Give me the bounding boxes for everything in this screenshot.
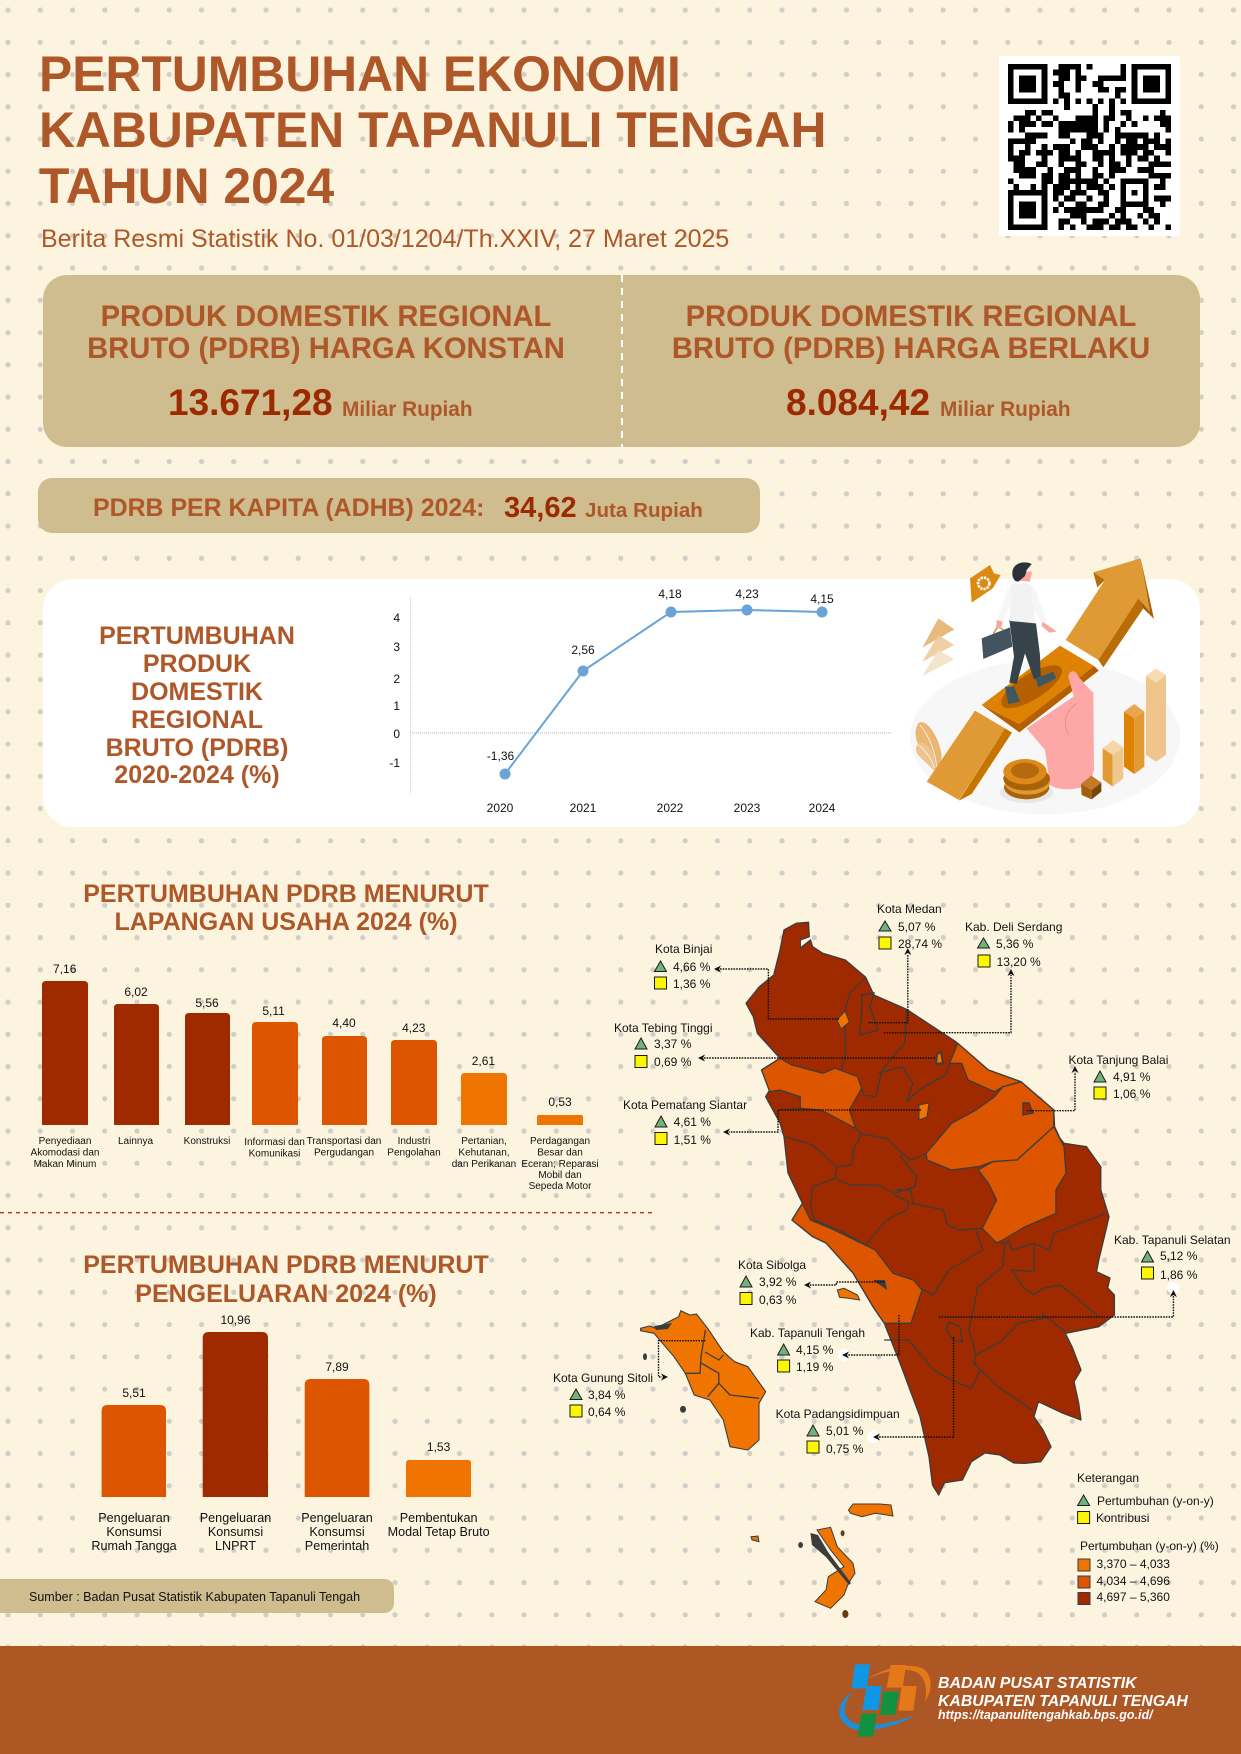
line chart: 4,18 (658, 587, 682, 601)
bar chart: pengeluaran: 5,51 (122, 1386, 146, 1400)
bar labels: Modal Tetap Bruto (388, 1525, 490, 1539)
callout: Kota Tanjung Balai: 4,91 % (1113, 1070, 1151, 1084)
bar labels: Industri (398, 1136, 430, 1147)
map: Sumatera Utara (641, 922, 1114, 1618)
line chart: 0 (393, 727, 400, 741)
heading: pengeluaran (83, 1251, 489, 1308)
bars (1103, 740, 1123, 755)
callout: Kab. Tapanuli Selatan: 5,12 % (1160, 1249, 1198, 1263)
bar labels: Pengeluaran (98, 1511, 170, 1525)
QR code (999, 56, 1180, 236)
callout: Kota Pematang Siantar: 4,61 % (674, 1115, 711, 1129)
map legend: 4,697 – 5,360 (1096, 1590, 1170, 1604)
panel text: harga berlaku: BRUTO (PDRB) HARGA BERLAKU (672, 333, 1150, 365)
line chart: 2022 (657, 801, 684, 815)
bar labels: Pertanian, (461, 1136, 507, 1147)
callout: Kota Padangsidimpuan: 0,75 % (826, 1442, 864, 1456)
callout: Kab. Deli Serdang: 5,36 % (996, 937, 1034, 951)
callout: Kota Gunung Sitoli: Kota Gunung Sitoli (553, 1371, 653, 1385)
bar labels: Makan Minum (34, 1159, 96, 1170)
line chart: 2 (393, 672, 400, 686)
callout: Kab. Tapanuli Tengah: Kab. Tapanuli Tengah (750, 1326, 865, 1340)
bar chart: lapangan usaha: 2,61 (472, 1054, 495, 1068)
callout: Kab. Deli Serdang (965, 920, 1062, 969)
chart heading: BRUTO (PDRB) (106, 734, 288, 762)
callout: Kota Tanjung Balai: Kota Tanjung Balai (1068, 1053, 1168, 1067)
bar labels: Konsumsi (106, 1525, 162, 1539)
callout: Kota Pematang Siantar (623, 1098, 747, 1147)
chart heading: DOMESTIK (131, 678, 263, 706)
map legend: Pertumbuhan (y-on-y) (%) (1080, 1539, 1219, 1553)
panel: PDRB per kapita (38, 478, 760, 533)
gear bubble (970, 565, 1001, 603)
cube (1081, 776, 1101, 790)
heading: pengeluaran: PENGELUARAN 2024 (%) (135, 1280, 437, 1308)
bar labels: Lainnya (118, 1136, 153, 1147)
panel: PDRB per kapita: PDRB PER KAPITA (ADHB) 2024: (93, 494, 484, 522)
small city shapes (837, 1011, 849, 1029)
callout: Kota Tebing Tinggi: 0,69 % (654, 1055, 692, 1069)
region borders (778, 977, 1106, 1410)
bar labels: Transportasi dan (307, 1136, 381, 1147)
title: TAHUN 2024 (39, 158, 334, 214)
callout: Kab. Deli Serdang: 13,20 % (997, 955, 1041, 969)
illustration: man walking on rising arrow (916, 558, 1166, 803)
map legend: Pertumbuhan (y-on-y) (1097, 1494, 1214, 1508)
callout: Kota Tanjung Balai (1068, 1053, 1168, 1101)
callout: Kota Medan: Kota Medan (877, 902, 942, 916)
map legend: Keterangan (1077, 1471, 1139, 1485)
line chart: 2020 (487, 801, 514, 815)
callout: Kota Padangsidimpuan: 5,01 % (826, 1424, 864, 1438)
map legend: 4,034 – 4,696 (1096, 1574, 1170, 1588)
bar labels: Sepeda Motor (529, 1181, 592, 1192)
line chart: 2024 (809, 801, 836, 815)
callout: Kab. Tapanuli Tengah: 4,15 % (796, 1343, 834, 1357)
callout: Kota Binjai: Kota Binjai (655, 942, 712, 956)
panel text: harga konstan: 13.671,28 (168, 382, 333, 423)
chart heading: REGIONAL (131, 706, 263, 734)
bar chart: lapangan usaha: 0,53 (548, 1095, 572, 1109)
line chart: 2023 (734, 801, 761, 815)
bar chart: lapangan usaha: 7,16 (53, 962, 77, 976)
panel text: harga berlaku: PRODUK DOMESTIK REGIONAL (686, 301, 1136, 333)
panel text: harga berlaku: 8.084,42 (786, 382, 930, 423)
callout: Kota Padangsidimpuan: Kota Padangsidimpuan (776, 1407, 900, 1421)
title: PERTUMBUHAN EKONOMI (39, 46, 681, 102)
callout: Kota Binjai: 1,36 % (673, 977, 711, 991)
bar labels: Eceran; Reparasi (521, 1159, 599, 1170)
bar labels: Pemerintah (305, 1539, 369, 1553)
agency name (938, 1675, 1188, 1722)
title (39, 46, 826, 214)
bar labels: Pergudangan (314, 1148, 374, 1158)
Nias island (641, 1311, 766, 1450)
callout: Kota Binjai: 4,66 % (673, 960, 711, 974)
line chart: 4,23 (735, 587, 759, 601)
panel text: harga konstan: PRODUK DOMESTIK REGIONAL (101, 301, 551, 333)
map legend: 3,370 – 4,033 (1096, 1557, 1170, 1571)
chart heading: PERTUMBUHAN (99, 622, 295, 650)
callout: Kota Pematang Siantar: Kota Pematang Siantar (623, 1098, 747, 1112)
callout: Kota Binjai (654, 942, 712, 991)
bar labels: Perdagangan (530, 1136, 590, 1147)
bar chart: pengeluaran: 10,96 (220, 1313, 251, 1327)
bar chart: lapangan usaha: 5,56 (195, 996, 219, 1010)
heading: pengeluaran: PERTUMBUHAN PDRB MENURUT (83, 1251, 489, 1279)
hand (1027, 692, 1094, 789)
coins (1000, 782, 1053, 803)
line chart: 3 (393, 640, 400, 654)
line chart: -1,36 (487, 749, 514, 763)
bar chart: pengeluaran (91, 1313, 490, 1553)
bar labels: Informasi dan (244, 1137, 305, 1148)
subtitle: release number: Berita Resmi Statistik No. 01/03/1204/Th.XXIV, 27 Maret 2025 (41, 225, 729, 253)
bar labels: Pembentukan (400, 1511, 477, 1525)
callout: Kab. Deli Serdang: Kab. Deli Serdang (965, 920, 1062, 934)
chart heading: 2020-2024 (%) (114, 761, 280, 789)
title: KABUPATEN TAPANULI TENGAH (39, 102, 826, 158)
map legend (1077, 1471, 1219, 1604)
panel: PDRB per kapita: 34,62 (504, 492, 577, 524)
bar labels (31, 1136, 599, 1192)
callout: Kab. Tapanuli Selatan: Kab. Tapanuli Selatan (1114, 1233, 1231, 1247)
callout: Kota Tebing Tinggi: 3,37 % (654, 1037, 692, 1051)
line chart: 4 (393, 611, 400, 625)
callout: Kota Sibolga: 3,92 % (759, 1275, 797, 1289)
bar labels: Akomodasi dan (31, 1148, 99, 1158)
heading: lapangan usaha (83, 880, 489, 936)
bar labels: Komunikasi (249, 1148, 300, 1160)
callout: Kab. Tapanuli Tengah (750, 1326, 865, 1374)
line chart: -1 (389, 756, 400, 770)
panel text: harga berlaku: Miliar Rupiah (940, 398, 1071, 421)
panel: PDRB per kapita: Juta Rupiah (585, 499, 703, 522)
callout: Kota Gunung Sitoli: 0,64 % (588, 1405, 626, 1419)
heading: lapangan usaha: PERTUMBUHAN PDRB MENURUT (83, 880, 489, 908)
triangles (922, 618, 954, 648)
icon: BPS logo (839, 1664, 931, 1737)
bar labels: Pengeluaran (200, 1511, 271, 1525)
line chart (389, 587, 891, 815)
callout: Kota Pematang Siantar: 1,51 % (674, 1133, 711, 1147)
bar labels: Rumah Tangga (91, 1539, 177, 1553)
callout: Kota Sibolga: 0,63 % (759, 1293, 797, 1307)
bar labels (91, 1511, 490, 1553)
southern islands (848, 1504, 893, 1517)
callout: Kab. Tapanuli Selatan: 1,86 % (1160, 1268, 1198, 1282)
bar labels: Mobil dan (538, 1170, 582, 1181)
callout: Kota Gunung Sitoli (553, 1371, 653, 1419)
source note (0, 1579, 394, 1613)
bar labels: Besar dan (537, 1148, 583, 1158)
callout: Kota Medan: 28,74 % (898, 937, 942, 951)
chart heading (99, 622, 295, 789)
panel: PDRB values (43, 275, 1200, 447)
bar chart: lapangan usaha: 4,23 (402, 1021, 426, 1035)
bar labels: Pengeluaran (301, 1511, 373, 1525)
line chart: 2,56 (571, 643, 595, 657)
heading: lapangan usaha: LAPANGAN USAHA 2024 (%) (114, 908, 458, 936)
bar chart: lapangan usaha (31, 962, 599, 1192)
panel text: harga konstan: BRUTO (PDRB) HARGA KONSTAN (87, 333, 565, 365)
bar chart: lapangan usaha: 4,40 (332, 1016, 356, 1030)
panel: growth chart card (43, 579, 1200, 827)
bar chart: pengeluaran: 1,53 (427, 1440, 451, 1454)
callout: Kab. Tapanuli Tengah: 1,19 % (796, 1360, 834, 1374)
bar chart: lapangan usaha: 6,02 (124, 985, 148, 999)
callout: Kota Tebing Tinggi (614, 1021, 713, 1069)
source note: Sumber : Badan Pusat Statistik Kabupaten Tapanuli Tengah (29, 1590, 360, 1604)
bar labels: Penyediaan (39, 1136, 91, 1147)
map legend: Kontribusi (1096, 1511, 1149, 1525)
bar labels: Kehutanan, (458, 1148, 510, 1158)
callout: Kota Medan (877, 902, 942, 951)
bar labels: dan Perikanan (452, 1159, 516, 1170)
arrow pieces (927, 711, 1005, 800)
panel text: harga berlaku (672, 301, 1150, 423)
bar labels: Konsumsi (208, 1525, 263, 1539)
leader lines (658, 954, 1179, 1443)
panel text: harga konstan (87, 301, 565, 423)
bar labels: Pengolahan (387, 1148, 441, 1158)
mainland regions (746, 922, 1114, 1495)
line chart: 1 (393, 699, 400, 713)
panel text: harga konstan: Miliar Rupiah (342, 398, 473, 421)
callout: Kota Sibolga (738, 1258, 806, 1307)
bar labels: Konstruksi (184, 1136, 230, 1147)
bar chart: pengeluaran: 7,89 (325, 1360, 349, 1374)
agency name: KABUPATEN TAPANULI TENGAH (938, 1693, 1188, 1710)
callout: Kota Padangsidimpuan (776, 1407, 900, 1456)
callout: Kota Gunung Sitoli: 3,84 % (588, 1388, 626, 1402)
agency name: BADAN PUSAT STATISTIK (938, 1675, 1138, 1692)
chart heading: PRODUK (143, 650, 251, 678)
callout: Kota Tebing Tinggi: Kota Tebing Tinggi (614, 1021, 713, 1035)
line chart: 4,15 (810, 592, 834, 606)
callout: Kota Tanjung Balai: 1,06 % (1113, 1087, 1151, 1101)
bar labels: LNPRT (215, 1539, 256, 1553)
footer band (0, 1646, 1241, 1754)
bar labels: Konsumsi (309, 1525, 365, 1539)
person (982, 627, 1012, 659)
callout: Kota Sibolga: Kota Sibolga (738, 1258, 806, 1272)
callout: Kota Medan: 5,07 % (898, 920, 936, 934)
agency name: https://tapanulitengahkab.bps.go.id/ (938, 1708, 1154, 1722)
callout: Kab. Tapanuli Selatan (1114, 1233, 1231, 1282)
bar chart: lapangan usaha: 5,11 (262, 1004, 285, 1018)
line chart: 2021 (570, 801, 597, 815)
